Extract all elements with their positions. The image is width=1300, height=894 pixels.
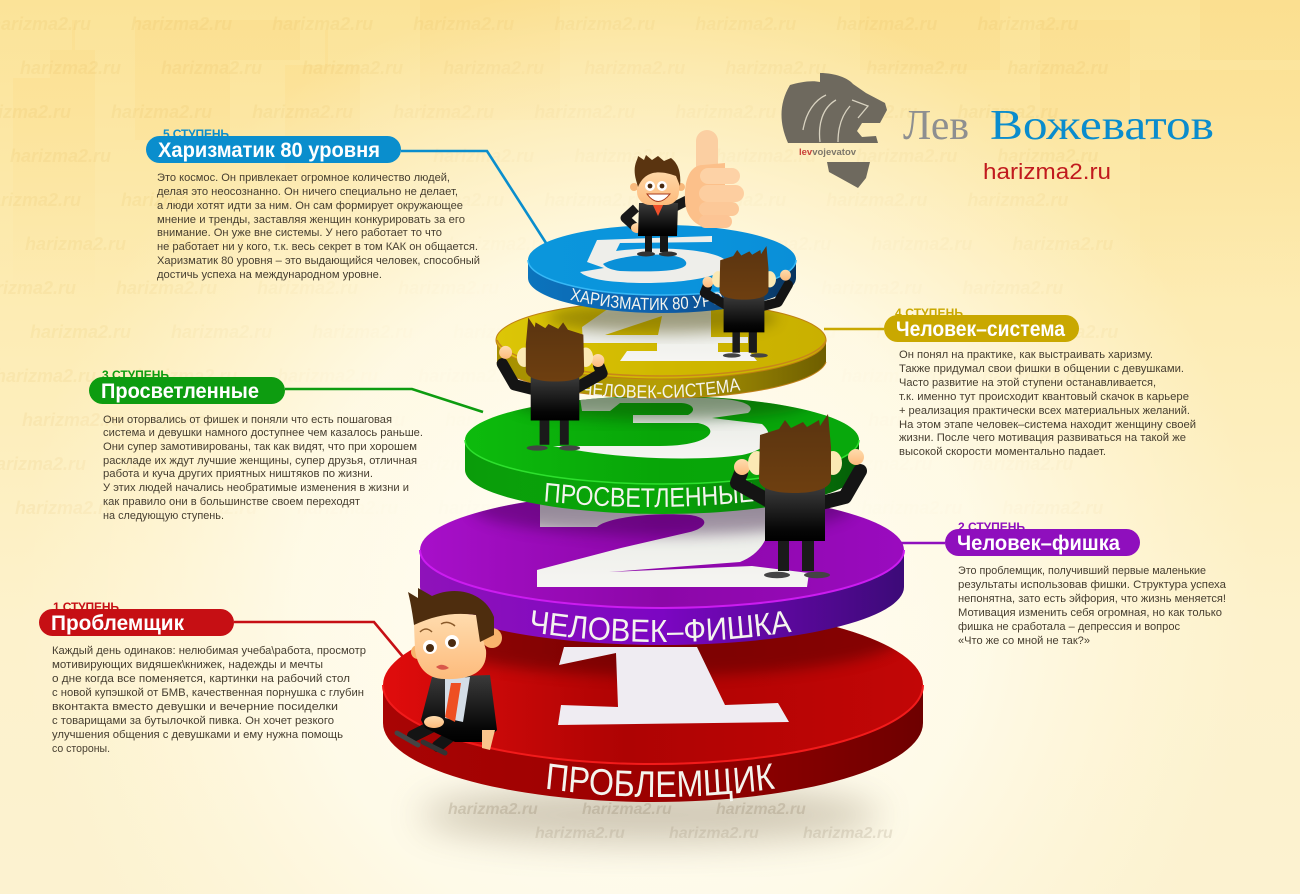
background: warm gradient with city and watermark: harizma2.ru harizma2.ru harizma2.ru harizma2.ru harizma2.ru harizma2.ru harizma2.ru harizma2.ru	[0, 190, 1068, 210]
disc label: Харизматик 80 уровня: ХАРИЗМАТИК 80 УРОВНЯ	[570, 288, 724, 310]
background: warm gradient with city and watermark: harizma2.ru harizma2.ru harizma2.ru harizma2.ru harizma2.ru harizma2.ru harizma2.ru harizma2.ru	[0, 366, 1083, 386]
background: warm gradient with city and watermark: harizma2.ru harizma2.ru harizma2.ru harizma2.ru harizma2.ru harizma2.ru harizma2.ru harizma2.ru	[25, 234, 1113, 254]
background: warm gradient with city and watermark: harizma2.ru	[669, 825, 759, 842]
body text: На этом этапе человек–система находит женщину своей	[899, 419, 1196, 431]
body text: вконтакта вместо девушки и вечерние посиделки	[52, 701, 338, 713]
panel: step 2: Человек–фишка	[957, 532, 1120, 555]
disc label: Человек-фишка	[532, 610, 792, 642]
panel: step 3: Просветленные	[101, 380, 259, 403]
background: warm gradient with city and watermark: harizma2.ru	[448, 801, 538, 818]
background: warm gradient with city and watermark: harizma2.ru harizma2.ru harizma2.ru harizma2.ru harizma2.ru harizma2.ru harizma2.ru harizma2.ru	[30, 322, 1118, 342]
numeral 5	[580, 236, 727, 283]
body text: не работает ни у кого, т.к. весь секрет в том КАК он общается.	[157, 241, 478, 253]
character 5: thumbs up	[625, 130, 744, 256]
body text: на следующую ступень.	[103, 510, 224, 522]
disc label: Просветленные	[545, 482, 754, 508]
body text: Часто развитие на этой ступени останавливается,	[899, 377, 1156, 389]
body text: результаты использовав фишки. Структура успеха	[958, 579, 1227, 591]
character 2: back view on purple disc	[734, 414, 864, 578]
background: warm gradient with city and watermark: harizma2.ru harizma2.ru harizma2.ru harizma2.ru harizma2.ru harizma2.ru harizma2.ru harizma2.ru	[22, 410, 1110, 430]
body text: мнение и тренды, заставляя женщин конкурировать за его	[157, 214, 465, 226]
body text: Также придумал свои фишки в общении с девушками.	[899, 363, 1184, 375]
panel: step 5: 5 СТУПЕНЬ	[163, 127, 229, 141]
background: warm gradient with city and watermark: harizma2.ru harizma2.ru harizma2.ru harizma2.ru harizma2.ru harizma2.ru harizma2.ru harizma2.ru	[10, 146, 1098, 166]
background: warm gradient with city and watermark: harizma2.ru harizma2.ru harizma2.ru harizma2.ru harizma2.ru harizma2.ru harizma2.ru harizma2.ru	[0, 278, 1063, 298]
body text	[52, 645, 366, 755]
numeral 3	[553, 398, 769, 458]
body text: непонятна, зато есть эйфория, что жизнь меняется!	[958, 593, 1226, 605]
character 1: sitting sad man	[397, 588, 502, 753]
numeral 4	[582, 306, 757, 361]
body text: о дне когда все поменяется, картинки на рабочий стол	[52, 673, 350, 685]
body text: Мотивация изменить себя огромная, но как только	[958, 607, 1222, 619]
disc label: Харизматик 80 уровня	[570, 288, 724, 310]
body text: Это космос. Он привлекает огромное количество людей,	[157, 172, 450, 184]
disc label: Человек-фишка: ЧЕЛОВЕК–ФИШКА	[532, 610, 792, 642]
body text: Они оторвались от фишек и поняли что есть пошаговая	[103, 414, 392, 426]
disc 4: yellow	[496, 306, 827, 428]
body text: улучшения общения с девушками и ему нужна помощь	[52, 729, 343, 741]
icon: thumb up hand	[685, 130, 744, 228]
body text: с новой купэшкой от БМВ, качественная порнушка с глубин	[52, 687, 364, 699]
disc 1: red	[382, 627, 924, 802]
background: warm gradient with city and watermark: harizma2.ru harizma2.ru harizma2.ru harizma2.ru harizma2.ru harizma2.ru harizma2.ru harizma2.ru	[0, 454, 1073, 474]
pill heading	[884, 315, 1079, 342]
background: warm gradient with city and watermark: harizma2.ru	[582, 801, 672, 818]
background: warm gradient with city and watermark: harizma2.ru	[535, 825, 625, 842]
body text: Он понял на практике, как выстраивать харизму.	[899, 349, 1153, 361]
body text: с товарищами за бутылочкой пивка. Он хочет резкого	[52, 715, 334, 727]
icon: lion head	[782, 73, 887, 188]
pill heading	[945, 529, 1140, 556]
background: warm gradient with city and watermark: harizma2.ru harizma2.ru harizma2.ru harizma2.ru harizma2.ru harizma2.ru harizma2.ru harizma2.ru	[0, 102, 1058, 122]
panel: step 2	[945, 520, 1227, 647]
background: warm gradient with city and watermark: harizma2.ru harizma2.ru harizma2.ru harizma2.ru harizma2.ru harizma2.ru harizma2.ru harizma2.ru	[15, 498, 1103, 518]
body text: + реализация практически всех материальных желаний.	[899, 405, 1190, 417]
body text: делая это неосознанно. Он ничего специально не делает,	[157, 186, 458, 198]
name: Лев	[903, 103, 969, 149]
body text: внимание. Он уже вне системы. У него работает то что	[157, 227, 442, 239]
disc label: Человек-система	[584, 378, 741, 398]
body text	[103, 414, 423, 522]
background: warm gradient with city and watermark: harizma2.ru	[803, 825, 893, 842]
body text: У этих людей начались необратимые изменения в жизни и	[103, 482, 409, 494]
panel: step 4: Человек–система	[896, 318, 1065, 341]
body text	[157, 172, 480, 281]
body text: Каждый день одинаков: нелюбимая учеба\работа, просмотр	[52, 645, 366, 657]
body text: мотивирующих видяшек\книжек, надежды и мечты	[52, 659, 323, 671]
panel: step 5	[146, 127, 480, 281]
numeral 1	[558, 647, 789, 725]
icon: lion head: levvojevatov	[799, 147, 857, 158]
disc label: Просветленные: ПРОСВЕТЛЕННЫЕ	[545, 482, 754, 508]
panel: step 2: 2 СТУПЕНЬ	[958, 520, 1025, 534]
body text: раскладе их ждут лучшие женщины, супер друзья, отличная	[103, 455, 417, 467]
pill heading	[89, 377, 285, 404]
panel: step 3	[89, 368, 423, 522]
body text: т.к. именно тут происходит квантовый скачок в карьере	[899, 391, 1189, 403]
disc label: Человек-система: ЧЕЛОВЕК-СИСТЕМА	[584, 378, 741, 398]
connector lines	[234, 151, 945, 658]
disc 3: green	[464, 397, 860, 544]
body text: Это проблемщик, получивший первые маленькие	[958, 565, 1206, 577]
body text	[958, 565, 1227, 647]
panel: step 4	[884, 306, 1196, 458]
body text: жизни. После чего мотивация развиваться на такой же	[899, 432, 1186, 444]
background: warm gradient with city and watermark: harizma2.ru harizma2.ru harizma2.ru harizma2.ru harizma2.ru harizma2.ru harizma2.ru harizma2.ru	[0, 14, 1078, 34]
pill heading	[39, 609, 234, 636]
numeral 2	[537, 504, 808, 587]
character 4: back view on yellow disc	[703, 246, 791, 358]
body text: а люди хотят идти за ним. Он сам формирует окружающее	[157, 200, 463, 212]
website: harizma2.ru	[983, 159, 1111, 184]
panel: step 1: Проблемщик	[51, 612, 184, 635]
panel: step 4: 4 СТУПЕНЬ	[895, 306, 963, 320]
body text: Харизматик 80 уровня – это выдающийся человек, способный	[157, 255, 480, 267]
disc 5: blue	[527, 225, 797, 343]
panel: step 3: 3 СТУПЕНЬ	[102, 368, 169, 382]
body text: высокой скорости моментально падает.	[899, 446, 1106, 458]
pill heading	[146, 136, 401, 163]
logo: lion and author name: Вожеватов	[990, 103, 1214, 149]
body text: как правило они в большинстве своем переходят	[103, 496, 360, 508]
background: warm gradient with city and watermark: harizma2.ru	[716, 801, 806, 818]
body text: работа и куча других приятных ништяков по жизни.	[103, 468, 373, 480]
panel: step 5: Харизматик 80 уровня	[158, 139, 380, 162]
body text: система и девушки намного доступнее чем казалось раньше.	[103, 427, 423, 439]
body text	[899, 349, 1196, 458]
logo: lion and author name	[782, 73, 1214, 188]
body text: фишка не сработала – депрессия и вопрос	[958, 621, 1180, 633]
background: warm gradient with city and watermark: harizma2.ru harizma2.ru harizma2.ru harizma2.ru harizma2.ru harizma2.ru harizma2.ru harizma2.ru	[20, 58, 1108, 78]
character 3: back view on green disc	[499, 318, 604, 451]
body text: «Что же со мной не так?»	[958, 635, 1090, 647]
panel: step 1: 1 СТУПЕНЬ	[53, 600, 119, 614]
panel: step 1	[39, 600, 366, 755]
body text: со стороны.	[52, 743, 110, 755]
body text: достичь успеха на международном уровне.	[157, 269, 382, 281]
disc 2: purple	[419, 502, 905, 645]
disc label: Проблемщик: ПРОБЛЕМЩИК	[547, 763, 776, 802]
body text: Они супер замотивированы, так как видят, что при хорошем	[103, 441, 417, 453]
